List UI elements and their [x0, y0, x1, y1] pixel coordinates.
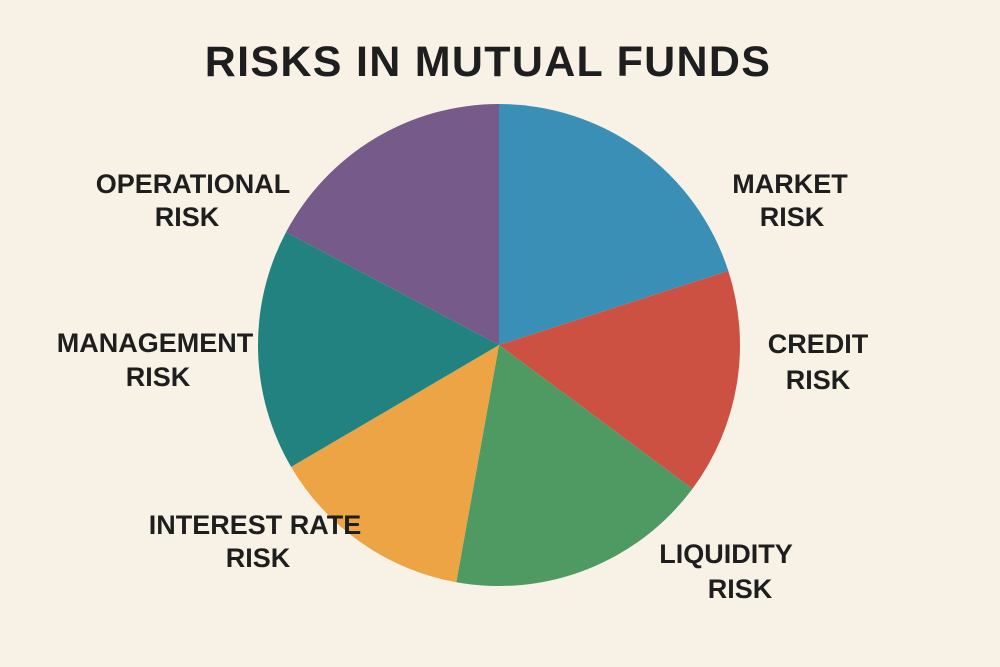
label: credit risk: CREDIT	[768, 329, 869, 359]
label: operational risk	[96, 169, 290, 232]
label: management risk	[57, 328, 254, 392]
label: credit risk: RISK	[786, 365, 851, 395]
slice: credit risk	[499, 271, 740, 489]
pie chart	[258, 104, 740, 586]
label: credit risk	[768, 329, 869, 395]
slice: management risk	[258, 232, 499, 467]
slice: interest rate risk	[291, 345, 499, 582]
label: management risk: RISK	[126, 362, 191, 392]
label: liquidity risk: LIQUIDITY	[659, 539, 793, 569]
label: operational risk: OPERATIONAL	[96, 169, 290, 199]
label: market risk: MARKET	[732, 169, 848, 199]
label: market risk	[732, 169, 848, 232]
label: liquidity risk	[659, 539, 793, 604]
title: RISKS IN MUTUAL FUNDS	[205, 38, 771, 86]
slice: market risk	[499, 104, 728, 345]
slice: liquidity risk	[456, 345, 692, 586]
label: operational risk: RISK	[155, 202, 220, 232]
label: interest rate risk: RISK	[226, 543, 291, 573]
label: interest rate risk	[149, 510, 361, 573]
slice: operational risk	[286, 104, 499, 345]
label: liquidity risk: RISK	[708, 574, 773, 604]
label: market risk: RISK	[760, 202, 825, 232]
label: management risk: MANAGEMENT	[57, 328, 254, 358]
label: interest rate risk: INTEREST RATE	[149, 510, 361, 540]
